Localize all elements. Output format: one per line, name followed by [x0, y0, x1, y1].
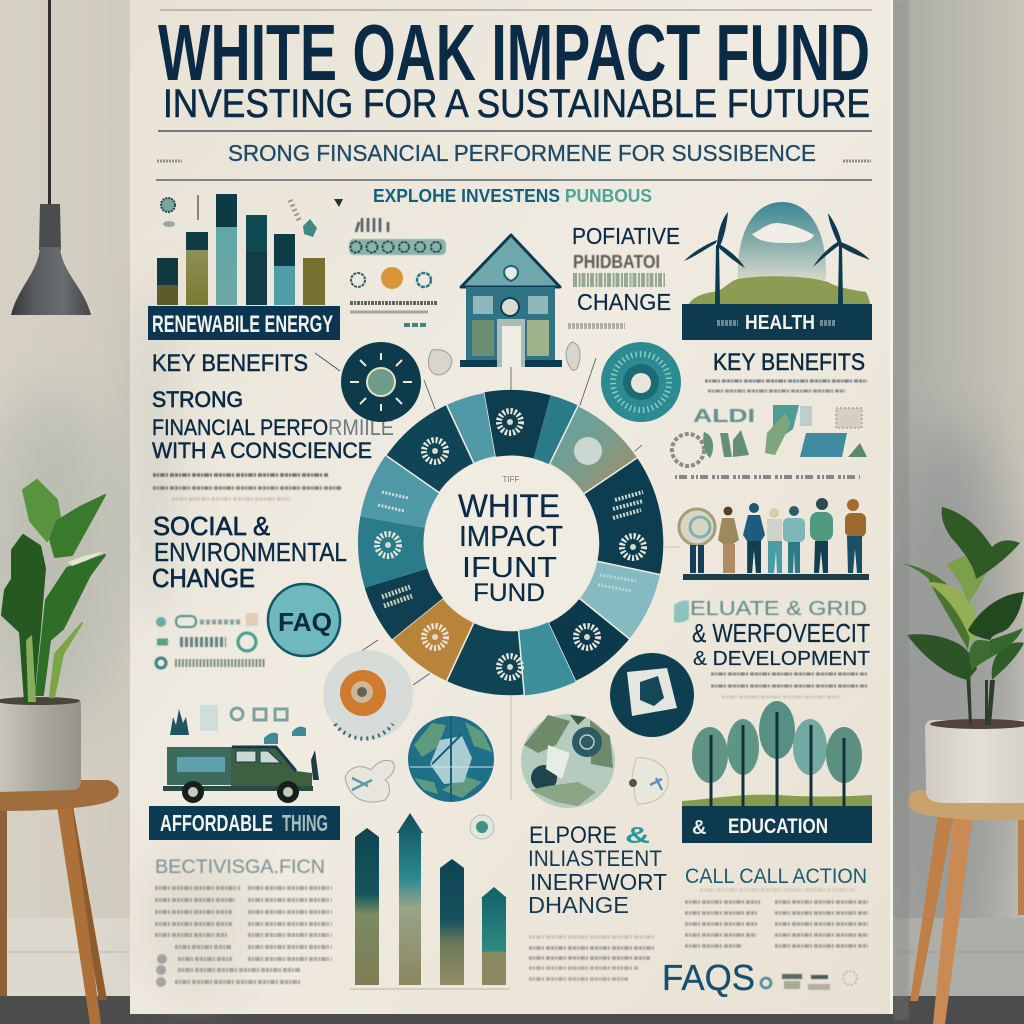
dark badge — [610, 653, 694, 737]
rule and tagline: SRONG FINSANCIAL PERFORMENE FOR SUSSIBENCE — [228, 140, 816, 166]
right plant and stool — [900, 507, 1024, 1024]
person 3 — [743, 503, 765, 573]
key benefits left: KEY BENEFITS — [152, 350, 308, 377]
people illustration — [679, 498, 869, 580]
FAQ badge: FAQ — [278, 607, 332, 637]
orange badge — [323, 650, 413, 740]
trees illustration — [682, 701, 872, 807]
banner: health: HEALTH — [745, 312, 815, 334]
truck wheels — [182, 781, 204, 803]
sketch icon right — [629, 758, 668, 804]
person 2 — [718, 506, 739, 573]
FAQs heading: FAQS — [662, 957, 755, 998]
banner: health — [682, 304, 872, 340]
globe right — [521, 714, 615, 808]
house body — [466, 287, 555, 360]
social and environmental change: SOCIAL & — [153, 511, 270, 541]
wheel segments — [358, 390, 664, 696]
doodle cluster with orange sun — [349, 218, 446, 325]
fine print call to action — [685, 890, 868, 946]
wheel centre title: FUND — [473, 579, 545, 607]
evaluate and workforce text — [674, 598, 870, 670]
wheel segment icons — [377, 411, 644, 678]
poster — [128, 0, 893, 1014]
banner: education: & — [692, 817, 706, 839]
tree trunks — [711, 712, 844, 807]
wind turbines scene — [684, 202, 870, 305]
banner: education — [682, 806, 872, 843]
wheel centre title: IMPACT — [459, 521, 563, 553]
fine print left — [153, 475, 342, 499]
wheel centre title: WHITE — [458, 488, 560, 524]
globe left — [408, 716, 494, 802]
evaluate and workforce text: & DEVELOPMENT — [693, 648, 870, 670]
ear doodle right — [566, 342, 580, 370]
truck illustration — [163, 705, 319, 803]
bar chart: renewable energy — [157, 194, 343, 305]
truck surroundings — [170, 709, 189, 735]
banner: affordable housing — [149, 806, 340, 840]
baseboard — [0, 918, 1024, 996]
strong financial block: STRONG — [152, 387, 243, 412]
dark circle icon: sun — [341, 342, 421, 422]
explore text block — [528, 822, 667, 918]
tree crowns — [692, 727, 728, 783]
sky dome — [738, 202, 826, 280]
strong financial block: FINANCIAL PERFORMIILE — [152, 415, 394, 440]
turbine right — [813, 213, 870, 305]
small footer icons — [761, 971, 857, 990]
person 6 — [810, 498, 833, 573]
left plant and stool — [0, 480, 119, 1024]
positive change text: POFIATIVE — [572, 223, 680, 249]
faded heading lower left: BECTIVISGA.FICN — [155, 857, 325, 878]
evaluate and workforce text: ELUATE & GRID — [690, 598, 867, 620]
banner: affordable housing: AFFORDABLE — [160, 810, 273, 836]
truck cab — [231, 747, 312, 790]
pendant lamp — [11, 0, 91, 315]
fine print right — [705, 381, 867, 391]
social and environmental change: ENVIRONMENTAL — [154, 537, 347, 567]
turbine left — [684, 212, 745, 305]
wheel centre title — [458, 475, 563, 607]
explore text block: INERFWORT — [530, 869, 667, 895]
banner: renewable energy — [148, 306, 340, 340]
stool — [908, 790, 1024, 1024]
social and environmental change — [152, 511, 347, 593]
ear doodle left — [428, 350, 452, 375]
social and environmental change: CHANGE — [152, 563, 255, 593]
ground bar — [683, 574, 869, 580]
right benefit icons: ALDI — [693, 406, 755, 426]
house roof — [461, 235, 560, 287]
poster shadow on wall — [893, 0, 909, 1020]
coloured bar fills — [157, 285, 178, 305]
strong financial block: WITH A CONSCIENCE — [152, 438, 372, 463]
explore text block: DHANGE — [528, 892, 629, 918]
subtitle: INVESTING FOR A SUSTAINABLE FUTURE — [163, 82, 870, 126]
ground — [682, 795, 872, 807]
stool — [0, 780, 119, 1024]
person 5 — [783, 506, 805, 573]
positive change text: CHANGE — [577, 289, 671, 315]
banner: education: EDUCATION — [728, 815, 828, 838]
truck box — [167, 747, 231, 785]
diagonal light shadows — [128, 280, 250, 1000]
floor — [0, 996, 1024, 1024]
sketch icon left — [345, 760, 394, 802]
banner: affordable housing: THING — [282, 810, 328, 836]
connector — [315, 353, 340, 371]
wheel centre title: TIFF — [503, 475, 520, 484]
fine print under development — [711, 674, 867, 697]
connectors between circles and wheel — [358, 358, 680, 800]
arrow bar chart — [350, 813, 510, 989]
strong financial block — [152, 387, 394, 463]
FAQ badge — [268, 584, 340, 656]
top-left doodles — [161, 195, 343, 237]
evaluate and workforce text: & WERFOVEECIT — [692, 618, 870, 648]
house — [460, 235, 562, 367]
fine print explore — [529, 937, 655, 979]
white ribbed pot — [925, 719, 1024, 803]
fine print lower left — [155, 888, 332, 985]
teal circle icon — [601, 342, 681, 422]
stems and leaves — [900, 507, 1024, 725]
person 7 — [845, 499, 866, 573]
positive change text: PHIDBATOI — [573, 252, 660, 272]
door — [497, 319, 525, 367]
hill — [688, 276, 870, 305]
call to action: CALL CALL ACTION — [685, 865, 867, 888]
section heading: explore investments: EXPLOHE INVESTENS PUNBOUS — [373, 186, 652, 206]
person 4 — [767, 508, 782, 573]
banner: renewable energy: RENEWABILE ENERGY — [152, 311, 333, 338]
dark bars — [157, 258, 178, 305]
explore text block: & — [625, 822, 650, 848]
top rule — [160, 9, 872, 11]
wheel centre — [425, 457, 597, 629]
impact fund wheel — [358, 390, 664, 696]
key benefits right: KEY BENEFITS — [713, 349, 865, 376]
cloud — [752, 223, 814, 243]
small social icons — [156, 613, 265, 668]
leaves — [2, 480, 105, 702]
positive change text — [568, 223, 680, 326]
windows — [473, 296, 493, 314]
right benefit icons — [672, 405, 867, 477]
person 1 swirl — [679, 509, 715, 573]
wheel centre title: IFUNT — [462, 552, 557, 584]
explore text block: INLIASTEENT — [528, 846, 662, 871]
grey pot — [0, 697, 81, 792]
explore text block: ELPORE — [529, 822, 617, 849]
